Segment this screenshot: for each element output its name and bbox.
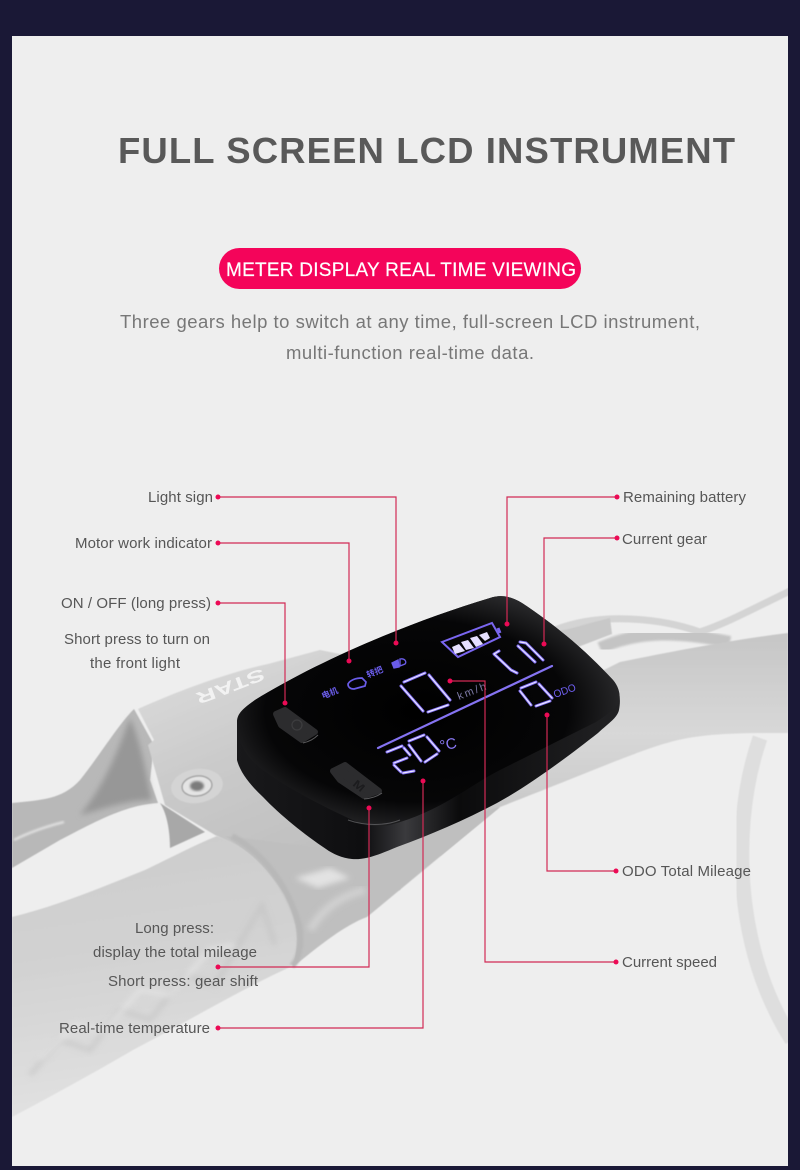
- callout: M button: Short press: gear shift: [108, 973, 259, 990]
- callout: M button: [93, 806, 372, 990]
- callout: on/off button: Short press to turn on: [64, 631, 210, 648]
- brake body lettering: STAR: [193, 664, 267, 708]
- callout: light sign: [148, 489, 398, 646]
- callout: current speed: [448, 678, 717, 971]
- callout: on/off button: ON / OFF (long press): [61, 595, 211, 612]
- callout: on/off button: the front light: [90, 655, 181, 672]
- collar under device: [246, 808, 499, 964]
- grip: [12, 836, 297, 1117]
- callout: current gear: Current gear: [622, 531, 707, 548]
- temperature unit: °C: [438, 735, 458, 755]
- device: LCD instrument: [237, 596, 620, 859]
- callout: light sign: Light sign: [148, 489, 213, 506]
- brake cable arc: [742, 738, 792, 1040]
- current speed digit: [401, 673, 450, 712]
- ODO digit: [520, 682, 552, 706]
- current gear digits: [494, 642, 543, 673]
- callout: motor work indicator: [75, 535, 352, 664]
- ODO label: ODO: [552, 682, 578, 701]
- callout: motor work indicator: Motor work indicator: [75, 535, 212, 552]
- banner pill: [219, 248, 581, 289]
- callout: current gear: [542, 531, 707, 646]
- temperature digits: [387, 735, 439, 773]
- button: M: [333, 765, 382, 799]
- callout: remaining battery: Remaining battery: [623, 489, 746, 506]
- icon: battery: [442, 623, 500, 657]
- speed unit: km/h: [456, 681, 488, 703]
- callout: real-time temperature: Real-time temperature: [59, 1020, 210, 1037]
- icon: headlight: [392, 659, 406, 668]
- device top face: [237, 596, 620, 826]
- brake body clamp: [138, 650, 420, 890]
- grip texture: [32, 980, 218, 1073]
- callout: remaining battery: [504, 489, 746, 626]
- callout: current speed: Current speed: [622, 954, 717, 971]
- button: M: M: [350, 778, 367, 795]
- callout: ODO total mileage: ODO Total Mileage: [622, 863, 751, 880]
- right handlebar tube: [466, 632, 788, 835]
- callout: M button: display the total mileage: [93, 944, 257, 961]
- description text: Three gears help to switch at any time, full-screen LCD instrument,: [120, 311, 700, 332]
- callout: M button: Long press:: [135, 920, 214, 937]
- button: power: [276, 710, 318, 743]
- title: FULL SCREEN LCD INSTRUMENT: [118, 130, 735, 171]
- divider line: [378, 666, 552, 748]
- icon: assist label: 转把: [365, 664, 385, 680]
- icon: motor indicator: [348, 678, 366, 689]
- callout: real-time temperature: [59, 778, 426, 1037]
- handlebar photo: [12, 590, 792, 1117]
- upper cable: [555, 590, 792, 632]
- device casing: [237, 596, 620, 859]
- brake lever: [12, 709, 158, 868]
- callout: on/off button: [61, 595, 288, 706]
- callout: ODO total mileage: [544, 712, 751, 880]
- bolt: [172, 770, 222, 803]
- description text: [120, 311, 700, 363]
- description text: multi-function real-time data.: [286, 342, 534, 363]
- icon: motor label: 电机: [320, 685, 340, 701]
- banner pill: METER DISPLAY REAL TIME VIEWING: [226, 260, 576, 281]
